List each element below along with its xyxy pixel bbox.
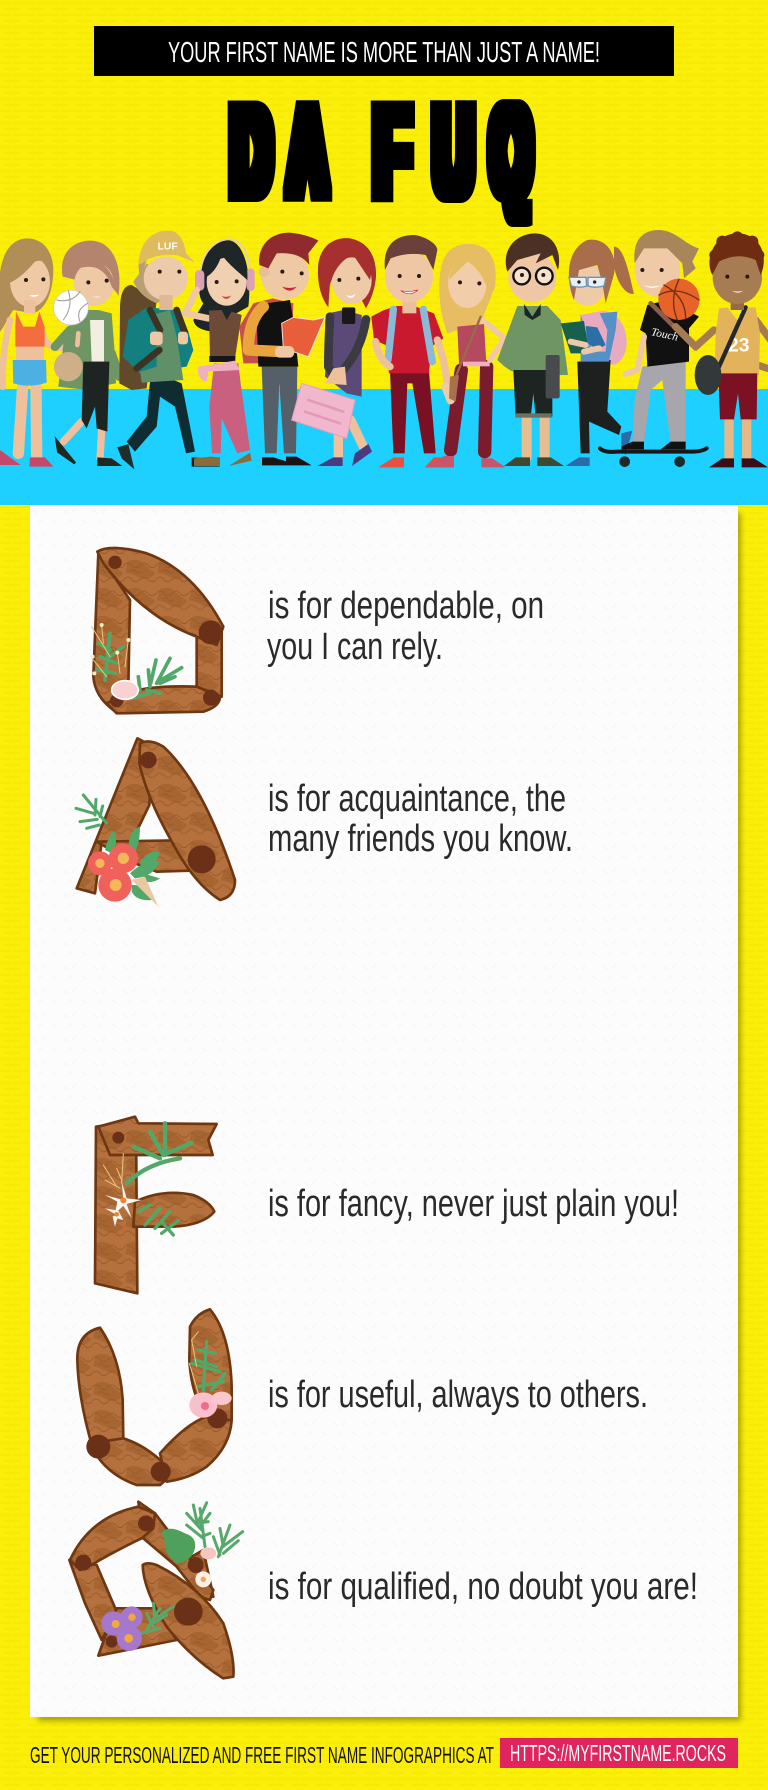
person: boy with glasses and laptop [497,233,568,466]
person: girl with volleyball [54,241,122,466]
people group illustration: right half [371,230,768,467]
text: A line: is for acquaintance, the [268,778,566,820]
text: D line: you I can rely. [267,626,443,668]
person: girl with headphones [185,239,255,466]
letter icon: wooden D with flowers [91,548,223,713]
person: boy in red shirt with blue straps [371,235,453,467]
person: boy with red-orange book [239,233,325,465]
text: D line [267,585,544,668]
title: DA FUQ: U [434,81,473,222]
person: boy in yellow number 23 tank [695,231,768,467]
letter icon: wooden U with pink flowers [77,1309,232,1485]
person: girl with tablet and pink backpack [561,240,634,466]
banner: tagline [94,26,674,76]
letter icon: wooden Q with purple flowers [69,1502,243,1678]
letter icon: wooden A with red flowers [76,738,235,907]
text: A line: many friends you know. [268,818,573,860]
person: hiker with backpack and cap [117,231,220,469]
person: skateboarder with basketball: Touch [650,326,680,344]
title: DA FUQ: Q [491,80,531,222]
title: DA FUQ: F [374,81,410,223]
text: A line [268,778,573,860]
text: D line: is for dependable, on [268,585,544,627]
letter icon: wooden F with white flowers [95,1117,217,1293]
person: girl in orange top [0,238,75,467]
person: hiker with backpack and cap: LUF [158,241,178,252]
title: DA FUQ [231,80,531,223]
people group illustration: left half [0,231,376,469]
panel: white content card [30,505,741,1721]
text: U line: is for useful, always to others. [268,1374,648,1416]
title: DA FUQ: A [288,80,327,222]
person: girl with pink case [292,238,376,466]
person: blonde girl with shoulder bag [426,244,506,467]
title: DA FUQ: D [231,80,271,222]
person: skateboarder with basketball [600,230,714,467]
cyan floor band [0,389,768,505]
person: boy in yellow number 23 tank: 23 [728,336,750,357]
